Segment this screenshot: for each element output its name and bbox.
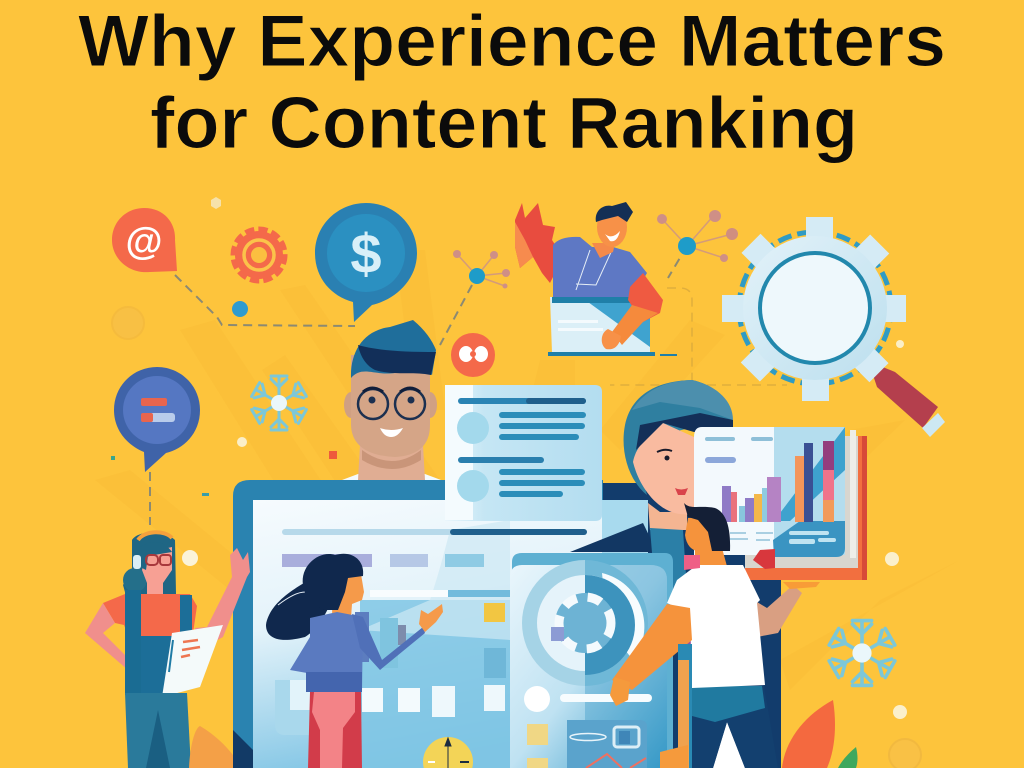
torso: [553, 237, 647, 297]
card heading bar: [458, 398, 586, 404]
divider bar: [458, 457, 544, 463]
sleeve: [628, 273, 663, 322]
hair: [624, 380, 733, 495]
clock: [423, 737, 473, 768]
hair: [123, 532, 176, 610]
white gap behind legs: [713, 722, 745, 768]
bar chart: [722, 441, 834, 522]
pants: [690, 686, 778, 768]
monitor screen: [253, 500, 670, 768]
icon: gear magnifier: [722, 217, 945, 437]
monitor frame: [233, 480, 603, 768]
neck: [695, 545, 728, 570]
arm pointing: [352, 614, 425, 670]
card: [694, 427, 845, 555]
hand: [419, 604, 443, 632]
white chart squares: [362, 688, 383, 712]
avatar 1: [457, 412, 489, 444]
back arm: [757, 585, 802, 637]
slider: [524, 686, 550, 712]
icon: network left: [453, 250, 510, 288]
leaves bottom right: [782, 700, 921, 768]
mini panel: [567, 720, 647, 768]
character: man in white shirt: [610, 503, 820, 768]
icon: dollar bubble: [315, 203, 417, 322]
character: woman presenting: [266, 554, 443, 768]
faded plant left: [189, 726, 233, 768]
icon: snowflake left: [252, 376, 306, 430]
shirt: [667, 565, 765, 688]
gear teeth: [722, 217, 906, 401]
gear body: [739, 232, 891, 384]
sweater: [290, 612, 363, 692]
ponytail: [266, 570, 340, 640]
hand: [602, 329, 621, 349]
green leaf: [838, 747, 858, 768]
panel: monitor: [233, 480, 781, 768]
neck: [592, 243, 615, 258]
icon: at sign bubble: @: [125, 221, 163, 263]
face: [351, 355, 430, 457]
icon: blue dot: [232, 301, 248, 317]
face and neck: [332, 568, 364, 618]
left arm: [85, 603, 130, 670]
panel: article card: [445, 385, 602, 521]
title line 2: for Content Ranking: [150, 83, 858, 164]
mouth: [675, 488, 688, 495]
navy right edge: [603, 483, 781, 768]
small accents: [111, 197, 907, 719]
front arm: [612, 604, 692, 690]
screen tabs: [282, 554, 372, 567]
head: [597, 207, 627, 247]
yellow tiles: [527, 724, 548, 745]
laptop: [550, 297, 650, 353]
overalls: [125, 590, 192, 697]
character: woman with teal hair: [570, 380, 733, 590]
icon: dollar bubble: $: [350, 222, 382, 285]
magnifier handle: [872, 365, 938, 428]
pants: [125, 693, 191, 768]
lens: [760, 253, 870, 363]
suit: [570, 523, 657, 552]
panel: dashboard tablet: [510, 553, 673, 768]
connector lines: [150, 246, 787, 525]
faint decorative brain: [112, 307, 144, 339]
neck: [358, 445, 425, 480]
icon: purple message bubble: [114, 367, 200, 472]
icon: orange face blob: [451, 333, 495, 377]
ears: [344, 392, 358, 418]
screen rows: [370, 590, 510, 597]
icon: network right: [657, 210, 738, 262]
dark belt gap: [678, 644, 692, 768]
neck and collar: [648, 503, 687, 530]
right arm: [195, 548, 250, 650]
shirt: [103, 594, 197, 640]
screen rule: [282, 529, 587, 535]
screen bars: [380, 618, 398, 668]
chart labels: [705, 437, 735, 441]
clipboard: [162, 625, 223, 697]
avatar 2: [457, 470, 489, 502]
icon: orange gear: [234, 230, 284, 280]
book hand: [753, 549, 775, 569]
face: [633, 423, 694, 515]
character: man with glasses: [342, 320, 441, 480]
glasses: [358, 389, 388, 419]
face: [142, 547, 172, 600]
fringe: [636, 413, 733, 450]
pages: [745, 436, 858, 568]
collar: [342, 474, 441, 480]
flame: [515, 203, 563, 283]
book cover: [745, 436, 867, 580]
background rays: [95, 250, 960, 690]
pants: [308, 692, 362, 768]
character: woman with headset: [85, 532, 250, 768]
sticky note: [484, 603, 505, 622]
chart book: [694, 427, 867, 580]
left pale block: [275, 680, 360, 735]
smile: [380, 428, 403, 437]
donut chart: [522, 560, 648, 686]
hair: [351, 320, 436, 378]
orange leaf: [782, 700, 835, 768]
purple strip: [677, 613, 691, 647]
forearm: [612, 305, 658, 345]
character: man with flame at laptop: [515, 202, 677, 356]
icon: at sign bubble: [112, 208, 177, 272]
icon: snowflake right: [829, 621, 895, 685]
faint rosette: [889, 739, 921, 768]
title: [78, 1, 946, 164]
title line 1: Why Experience Matters: [78, 1, 946, 82]
head: [685, 516, 716, 552]
hair: [303, 554, 363, 610]
